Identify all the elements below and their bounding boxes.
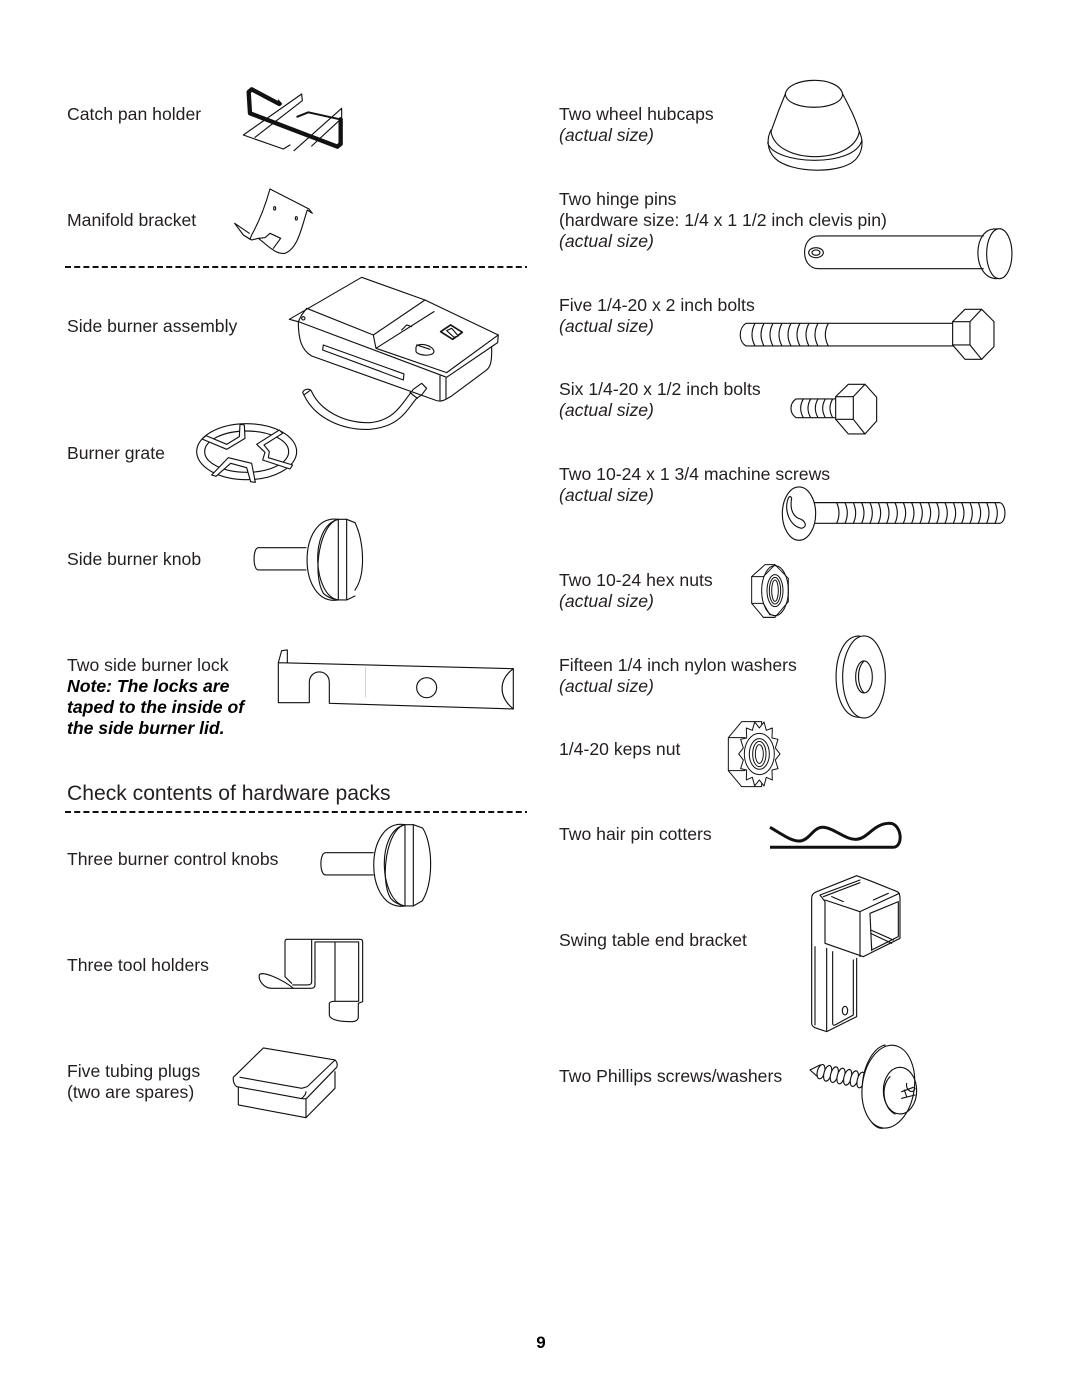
text: (actual size) <box>559 400 654 420</box>
text: (actual size) <box>559 676 654 696</box>
text: (actual size) <box>559 485 654 505</box>
icon: swing table end bracket <box>812 876 900 1032</box>
label: manifold bracket: Manifold bracket <box>67 210 196 230</box>
label: tool holders: Three tool holders <box>67 955 209 975</box>
icon: tubing plug <box>233 1048 337 1118</box>
label: six bolts: Six 1/4-20 x 1/2 inch bolts <box>559 379 761 399</box>
note about locks: Note: The locks are <box>67 676 230 696</box>
label: side burner assembly: Side burner assembly <box>67 316 238 336</box>
label: machine screws: Two 10-24 x 1 3/4 machine screws <box>559 464 830 484</box>
text: (actual size) <box>559 125 654 145</box>
icon: hair pin cotter <box>770 823 900 847</box>
icon: clevis pin <box>805 229 1012 279</box>
divider line <box>65 266 527 268</box>
icon: side burner assembly <box>289 277 498 429</box>
label: wheel hubcaps: Two wheel hubcaps <box>559 104 714 124</box>
label: burner control knobs: Three burner control knobs <box>67 849 279 869</box>
icon: burner control knob <box>321 824 431 906</box>
icon: wheel hubcap <box>768 80 862 170</box>
label: hex nuts: Two 10-24 hex nuts <box>559 570 713 590</box>
text: (actual size) <box>559 316 654 336</box>
note about locks: the side burner lid. <box>67 718 225 738</box>
icon: tool holder <box>259 939 363 1022</box>
divider line <box>65 811 527 813</box>
text: (hardware size: 1/4 x 1 1/2 inch clevis pin) <box>559 210 887 230</box>
icon: side burner knob <box>254 519 363 600</box>
icon: side burner lock <box>278 650 513 709</box>
icon: long bolt <box>740 309 994 359</box>
label: side burner lock: Two side burner lock <box>67 655 229 675</box>
icon: machine screw <box>782 487 1005 540</box>
label: swing table end bracket: Swing table end bracket <box>559 930 747 950</box>
label: side burner knob: Side burner knob <box>67 549 201 569</box>
label: catch pan holder: Catch pan holder <box>67 104 201 124</box>
icon: catch pan holder <box>243 89 342 151</box>
label: five bolts: Five 1/4-20 x 2 inch bolts <box>559 295 755 315</box>
icon: manifold bracket <box>235 189 312 253</box>
label: nylon washers: Fifteen 1/4 inch nylon washers <box>559 655 797 675</box>
heading: check contents of hardware packs: Check contents of hardware packs <box>67 782 391 805</box>
icon: phillips screw with washer <box>810 1042 920 1132</box>
page number: 9 <box>536 1333 546 1352</box>
label: keps nut: 1/4-20 keps nut <box>559 739 680 759</box>
note about locks: taped to the inside of <box>67 697 246 717</box>
label: burner grate: Burner grate <box>67 443 165 463</box>
icon: short bolt <box>791 384 877 434</box>
text: (actual size) <box>559 231 654 251</box>
text: (two are spares) <box>67 1082 194 1102</box>
label: hair pin cotters: Two hair pin cotters <box>559 824 712 844</box>
icon: nylon washer <box>836 636 885 718</box>
note about locks <box>67 676 246 738</box>
icon: keps nut <box>728 722 780 787</box>
icon: hex nut <box>752 565 788 617</box>
label: tubing plugs: Five tubing plugs <box>67 1061 200 1081</box>
text: (actual size) <box>559 591 654 611</box>
icon: burner grate <box>197 424 297 482</box>
label: hinge pins: Two hinge pins <box>559 189 677 209</box>
label: phillips screws and washers: Two Phillips screws/washers <box>559 1066 782 1086</box>
